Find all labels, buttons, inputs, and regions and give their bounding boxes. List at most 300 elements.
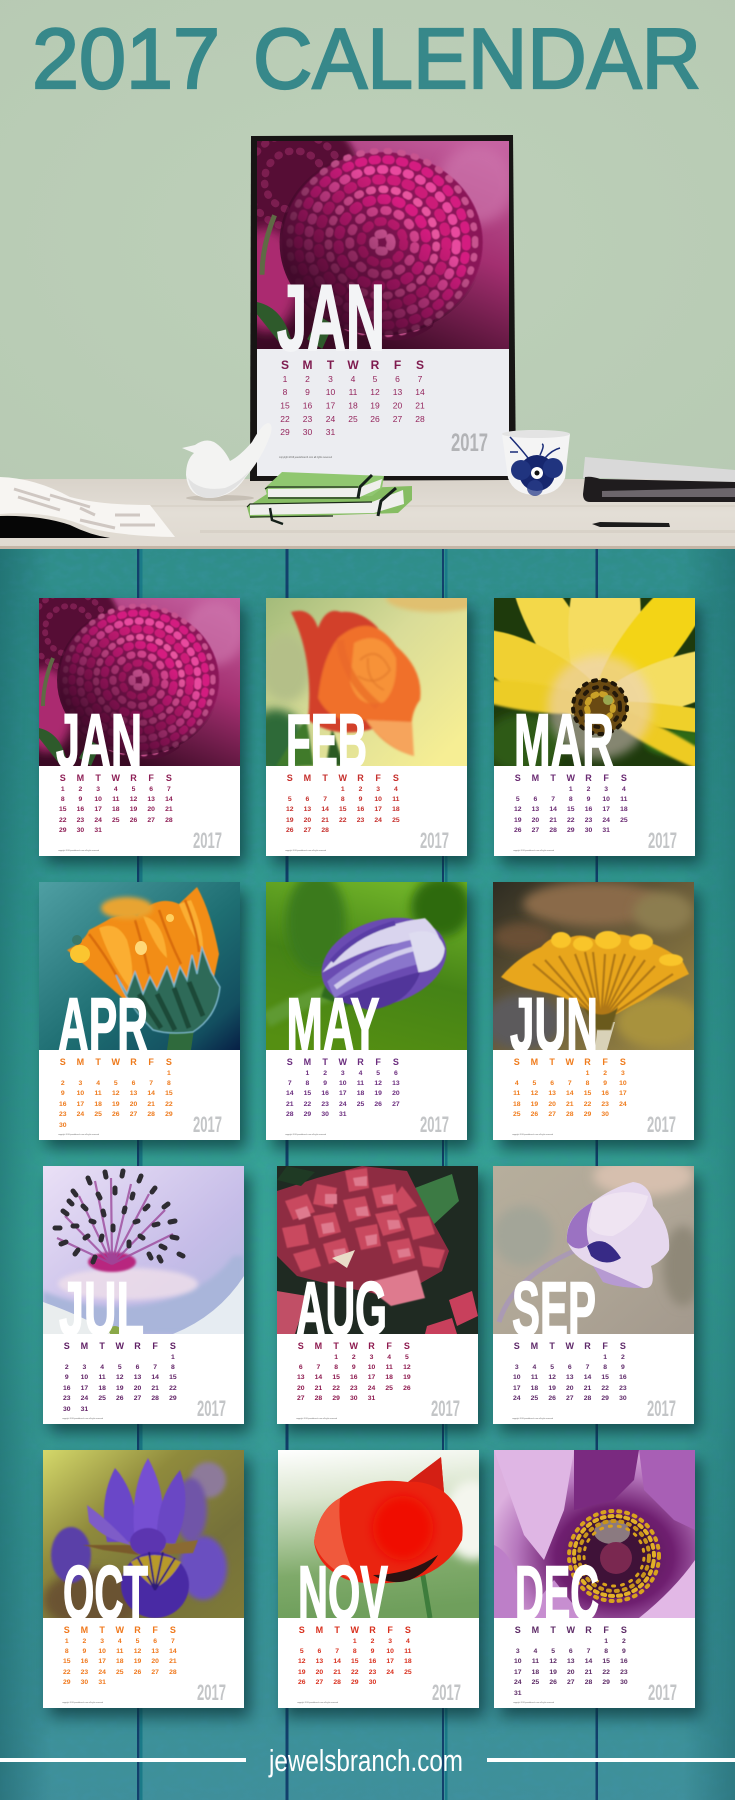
weekdays: F (603, 772, 609, 782)
dates: 20 (147, 806, 155, 813)
dates: 3 (515, 1364, 519, 1371)
dates: 25 (385, 1385, 393, 1392)
dates: 30 (601, 1111, 609, 1118)
dates: 9 (587, 796, 590, 803)
weekdays: F (152, 1340, 158, 1350)
photo: golden daisy (493, 882, 694, 1050)
dates: 20 (532, 817, 539, 824)
dates: 3 (100, 1638, 104, 1644)
dates: 24 (81, 1395, 88, 1402)
photo: purple poppy with gold stamens (494, 1450, 695, 1618)
dates: 29 (584, 1111, 591, 1118)
photo: purple iris (43, 1450, 244, 1618)
dates: 27 (316, 1679, 323, 1686)
weekdays: T (322, 1056, 328, 1066)
month: AUG: AUG (296, 1267, 387, 1352)
dates: 14 (549, 806, 557, 813)
dates: 22 (339, 817, 347, 824)
dates: 13 (532, 806, 539, 813)
dates: 25 (116, 1669, 124, 1676)
dates: 21 (584, 1385, 591, 1392)
icon: blue flower cup (502, 430, 570, 496)
dates: 20 (297, 1385, 305, 1392)
dates: 27 (134, 1395, 141, 1402)
dates (286, 1070, 400, 1118)
dates: 10 (368, 1364, 375, 1371)
dates: 24 (77, 1111, 84, 1118)
dates: 2 (323, 1070, 327, 1076)
poster weekdays: T (327, 358, 335, 372)
weekdays: T (549, 1340, 555, 1350)
dates: 24 (619, 1101, 627, 1108)
dates: 13 (567, 1658, 575, 1665)
weekdays: M (77, 1056, 84, 1066)
dates: 1 (341, 786, 345, 792)
dates: 10 (602, 796, 610, 803)
dates: 7 (288, 1080, 292, 1087)
poster dates: 5 (373, 374, 378, 384)
dates: 13 (147, 796, 155, 803)
weekdays: M (315, 1340, 322, 1350)
dates: 5 (132, 786, 135, 792)
dates: 9 (323, 1080, 327, 1087)
icon: pen (592, 522, 670, 527)
poster dates: 2 (305, 374, 310, 384)
small print: copyright 2016 jewelsbranch.com all rights reserved (62, 1417, 103, 1420)
dates: 26 (112, 1111, 120, 1118)
weekdays: W (566, 1340, 574, 1350)
dates: 3 (96, 786, 100, 792)
dates: 22 (351, 1669, 359, 1676)
dates: 28 (566, 1111, 574, 1118)
dates: 23 (620, 1669, 628, 1676)
dates: 13 (304, 806, 311, 813)
weekdays: W (350, 1340, 358, 1350)
poster dates: 4 (351, 374, 356, 384)
dates: 29 (602, 1679, 610, 1686)
dates: 15 (584, 1090, 591, 1097)
dates: 15 (165, 1090, 173, 1097)
dates: 26 (548, 1395, 556, 1402)
dates: 23 (369, 1669, 376, 1676)
dates: 1 (586, 1070, 589, 1076)
dates: 7 (335, 1648, 339, 1655)
dates: 18 (385, 1374, 393, 1381)
dates: 17 (386, 1658, 394, 1665)
card: November (278, 1450, 479, 1708)
dates: 7 (149, 1080, 153, 1087)
dates: 7 (171, 1638, 175, 1644)
dates: 7 (323, 796, 327, 803)
small print: copyright 2016 jewelsbranch.com all rights reserved (58, 849, 99, 852)
dates: 12 (116, 1374, 124, 1381)
dates: 8 (61, 796, 65, 803)
dates: 30 (77, 827, 84, 834)
weekdays: S (298, 1340, 304, 1350)
dates: 21 (151, 1385, 159, 1392)
weekdays (287, 772, 399, 782)
dates: 9 (621, 1364, 625, 1371)
dates: 24 (94, 817, 102, 824)
poster dates: 23 (303, 414, 312, 424)
dates: 22 (165, 1101, 173, 1108)
dates: 22 (602, 1669, 610, 1676)
weekdays: M (304, 1056, 311, 1066)
dates: 11 (531, 1374, 538, 1381)
dates: 26 (531, 1111, 538, 1118)
wood panels (0, 549, 735, 1800)
dates: 8 (603, 1364, 607, 1371)
dates (286, 786, 400, 834)
weekdays: S (170, 1340, 176, 1350)
dates: 5 (300, 1648, 304, 1655)
weekdays: T (99, 1340, 105, 1350)
dates: 18 (94, 1101, 102, 1108)
dates: 3 (376, 786, 380, 792)
dates: 25 (392, 817, 400, 824)
dates: 17 (98, 1658, 106, 1665)
dates: 11 (112, 796, 119, 803)
dates: 31 (368, 1395, 375, 1402)
weekdays: M (531, 1340, 538, 1350)
weekdays: S (170, 1624, 176, 1634)
small print: copyright 2016 jewelsbranch.com all rights reserved (512, 1133, 553, 1136)
dates (513, 1070, 627, 1118)
dates: 31 (514, 1690, 522, 1697)
dates: 16 (77, 806, 84, 813)
dates: 24 (514, 1679, 522, 1686)
weekdays: M (531, 1056, 538, 1066)
title (32, 12, 701, 107)
weekdays: S (299, 1624, 305, 1634)
dates: 9 (83, 1648, 86, 1655)
dates: 16 (620, 1658, 628, 1665)
dates: 4 (622, 786, 626, 792)
small print: copyright 2016 jewelsbranch.com all rights reserved (285, 1133, 326, 1136)
poster dates: 7 (418, 374, 423, 384)
dates: 1 (334, 1354, 338, 1360)
poster dates: 29 (280, 427, 290, 437)
weekdays: R (585, 772, 592, 782)
weekdays: R (357, 1056, 364, 1066)
dates: 18 (392, 806, 400, 813)
dates: 17 (619, 1090, 627, 1097)
dates: 1 (65, 1638, 69, 1644)
dates: 14 (147, 1090, 155, 1097)
poster dates: 18 (348, 400, 358, 410)
dates: 1 (306, 1070, 309, 1076)
dates: 6 (306, 796, 309, 803)
photo: lilac anemone (43, 1166, 244, 1334)
dates: 1 (603, 1354, 607, 1360)
dates: 21 (315, 1385, 322, 1392)
poster dates: 12 (370, 387, 380, 397)
dates: 17 (602, 806, 610, 813)
dates: 27 (392, 1101, 400, 1108)
dates: 16 (59, 1101, 67, 1108)
month: JUN: JUN (510, 983, 598, 1068)
dates: 29 (601, 1395, 609, 1402)
dates: 29 (63, 1679, 71, 1686)
dates: 13 (151, 1648, 159, 1655)
dates: 26 (134, 1669, 141, 1676)
dates: 27 (566, 1395, 574, 1402)
dates: 29 (304, 1111, 311, 1118)
poster dates: 17 (326, 400, 335, 410)
weekdays: F (148, 1056, 154, 1066)
poster small print: copyright 2016 jewelsbranch.com all rights reserved (279, 456, 333, 459)
dates: 7 (153, 1364, 157, 1371)
weekdays: S (287, 1056, 293, 1066)
dates: 29 (59, 827, 67, 834)
dates: 5 (533, 1080, 536, 1087)
weekdays: W (567, 1624, 575, 1634)
dates: 11 (513, 1090, 520, 1097)
dates: 23 (619, 1385, 627, 1392)
dates: 9 (65, 1374, 69, 1381)
dates: 5 (550, 1364, 554, 1371)
dates: 5 (376, 1070, 380, 1076)
dates: 25 (357, 1101, 364, 1108)
weekdays: S (60, 772, 66, 782)
dates: 19 (298, 1669, 306, 1676)
dates: 5 (136, 1638, 139, 1644)
dates: 4 (533, 1364, 536, 1371)
dates: 28 (333, 1679, 341, 1686)
dates: 15 (63, 1658, 71, 1665)
dates: 11 (404, 1648, 411, 1655)
dates: 21 (585, 1669, 592, 1676)
poster dates: 14 (415, 387, 425, 397)
dates: 29 (567, 827, 575, 834)
dates: 20 (567, 1669, 575, 1676)
small print: copyright 2016 jewelsbranch.com all rights reserved (513, 1701, 554, 1704)
small print: copyright 2016 jewelsbranch.com all rights reserved (58, 1133, 99, 1136)
dates: 22 (59, 817, 67, 824)
weekdays: F (386, 1340, 392, 1350)
dates: 14 (151, 1374, 159, 1381)
month: MAY: MAY (286, 983, 380, 1068)
dates: 13 (392, 1080, 400, 1087)
dates: 19 (116, 1385, 124, 1392)
dates: 24 (386, 1669, 394, 1676)
dates: 6 (534, 796, 537, 803)
dates: 22 (304, 1101, 311, 1108)
dates: 19 (548, 1385, 556, 1392)
dates: 18 (532, 1669, 539, 1676)
dates: 4 (387, 1354, 391, 1360)
dates: 20 (392, 1090, 400, 1097)
weekdays: F (152, 1624, 158, 1634)
weekdays: R (130, 1056, 137, 1066)
dates: 15 (351, 1658, 359, 1665)
small print: copyright 2016 jewelsbranch.com all rights reserved (296, 1417, 337, 1420)
dates: 6 (149, 786, 153, 792)
weekdays: W (566, 1056, 574, 1066)
dates: 10 (81, 1374, 88, 1381)
dates: 29 (351, 1679, 359, 1686)
month: JUL: JUL (59, 1267, 144, 1352)
icon: ring binder (583, 457, 735, 502)
dates: 1 (569, 786, 573, 792)
dates: 5 (288, 796, 292, 803)
dates: 3 (83, 1364, 86, 1371)
weekdays: S (64, 1624, 70, 1634)
dates: 16 (585, 806, 592, 813)
dates: 26 (374, 1101, 382, 1108)
dates: 2 (61, 1080, 65, 1087)
dates: 7 (317, 1364, 320, 1371)
weekdays: T (334, 1624, 340, 1634)
dates: 28 (147, 1111, 155, 1118)
dates: 18 (620, 806, 628, 813)
dates: 21 (321, 817, 329, 824)
dates: 16 (357, 806, 364, 813)
card: September (493, 1166, 694, 1424)
weekdays: S (393, 772, 399, 782)
card: February (266, 598, 467, 856)
weekdays: T (333, 1340, 339, 1350)
dates: 3 (370, 1354, 373, 1360)
poster dates: 8 (283, 387, 288, 397)
dates: 23 (59, 1111, 67, 1118)
weekdays: T (95, 1056, 101, 1066)
weekdays: S (405, 1624, 411, 1634)
dates: 19 (134, 1658, 141, 1665)
dates: 28 (286, 1111, 294, 1118)
dates: 2 (622, 1638, 626, 1644)
poster dates: 20 (393, 400, 402, 410)
dates: 19 (514, 817, 522, 824)
dates: 30 (620, 1679, 628, 1686)
month: OCT: OCT (63, 1551, 148, 1636)
dates: 30 (369, 1679, 376, 1686)
month: FEB: FEB (286, 699, 367, 784)
dates: 18 (357, 1090, 364, 1097)
weekdays (515, 772, 627, 782)
dates: 9 (622, 1648, 626, 1655)
dates: 2 (83, 1638, 86, 1644)
dates (63, 1638, 177, 1686)
dates: 28 (165, 817, 173, 824)
dates: 30 (585, 827, 592, 834)
dates: 3 (621, 1070, 625, 1076)
weekdays: S (287, 772, 293, 782)
weekdays (287, 1056, 399, 1066)
dates: 27 (151, 1669, 159, 1676)
weekdays: M (304, 772, 311, 782)
dates: 22 (169, 1385, 177, 1392)
dates: 9 (371, 1648, 374, 1655)
dates: 5 (118, 1364, 122, 1371)
dates: 9 (352, 1364, 356, 1371)
poster weekdays: W (347, 358, 359, 372)
dates: 12 (403, 1364, 411, 1371)
icon: open magazine (0, 477, 175, 538)
poster dates: 25 (348, 414, 358, 424)
weekdays: M (532, 1624, 539, 1634)
dates: 26 (298, 1679, 306, 1686)
poster year: 2017 (451, 429, 488, 457)
dates: 30 (619, 1395, 627, 1402)
dates: 17 (368, 1374, 375, 1381)
icon: white ceramic bird (182, 423, 272, 501)
dates: 19 (112, 1101, 120, 1108)
dates: 31 (602, 827, 610, 834)
weekdays: F (602, 1340, 608, 1350)
dates: 7 (587, 1648, 590, 1655)
dates: 19 (403, 1374, 411, 1381)
dates: 10 (514, 1658, 522, 1665)
dates: 17 (81, 1385, 88, 1392)
dates: 16 (369, 1658, 376, 1665)
dates: 29 (165, 1111, 173, 1118)
card: April (39, 882, 240, 1140)
dates: 20 (130, 1101, 137, 1108)
wall (0, 0, 735, 480)
dates: 22 (601, 1385, 609, 1392)
weekdays: S (166, 772, 172, 782)
dates: 12 (298, 1658, 306, 1665)
dates: 15 (602, 1658, 610, 1665)
photo: yellow daisy (494, 598, 695, 766)
dates: 26 (514, 827, 522, 834)
poster dates: 19 (370, 400, 380, 410)
dates: 17 (513, 1385, 521, 1392)
weekdays: M (316, 1624, 323, 1634)
month: SEP: SEP (512, 1267, 596, 1352)
dates (59, 1070, 173, 1129)
dates: 6 (569, 1648, 573, 1655)
dates: 6 (132, 1080, 135, 1087)
dates: 24 (374, 817, 382, 824)
weekdays (60, 1056, 172, 1066)
dates: 13 (548, 1090, 556, 1097)
dates: 20 (316, 1669, 323, 1676)
dates: 4 (114, 786, 118, 792)
dates: 4 (534, 1648, 537, 1655)
dates: 6 (153, 1638, 157, 1644)
dates: 4 (359, 1070, 362, 1076)
poster month: JAN (277, 265, 385, 370)
small print: copyright 2016 jewelsbranch.com all rights reserved (285, 849, 326, 852)
photo: pink hydrangea (277, 1166, 478, 1334)
dates: 28 (151, 1395, 159, 1402)
poster weekdays: R (371, 358, 380, 372)
dates: 17 (514, 1669, 522, 1676)
weekdays: T (95, 772, 101, 782)
weekdays: T (322, 772, 328, 782)
weekdays: M (532, 772, 539, 782)
footer website: jewelsbranch.com (268, 1743, 463, 1778)
dates: 2 (621, 1354, 625, 1360)
weekdays: W (339, 1056, 347, 1066)
weekdays: W (116, 1340, 124, 1350)
poster dates: 3 (328, 374, 333, 384)
dates: 2 (352, 1354, 356, 1360)
dates: 26 (130, 817, 137, 824)
photo: purple bud on green (266, 882, 467, 1050)
dates: 14 (333, 1658, 341, 1665)
dates: 21 (147, 1101, 155, 1108)
dates: 24 (513, 1395, 521, 1402)
month: MAR: MAR (514, 699, 614, 784)
dates: 13 (134, 1374, 141, 1381)
dates: 15 (601, 1374, 609, 1381)
weekdays: S (514, 1340, 520, 1350)
dates: 5 (551, 1648, 555, 1655)
weekdays: M (77, 772, 84, 782)
